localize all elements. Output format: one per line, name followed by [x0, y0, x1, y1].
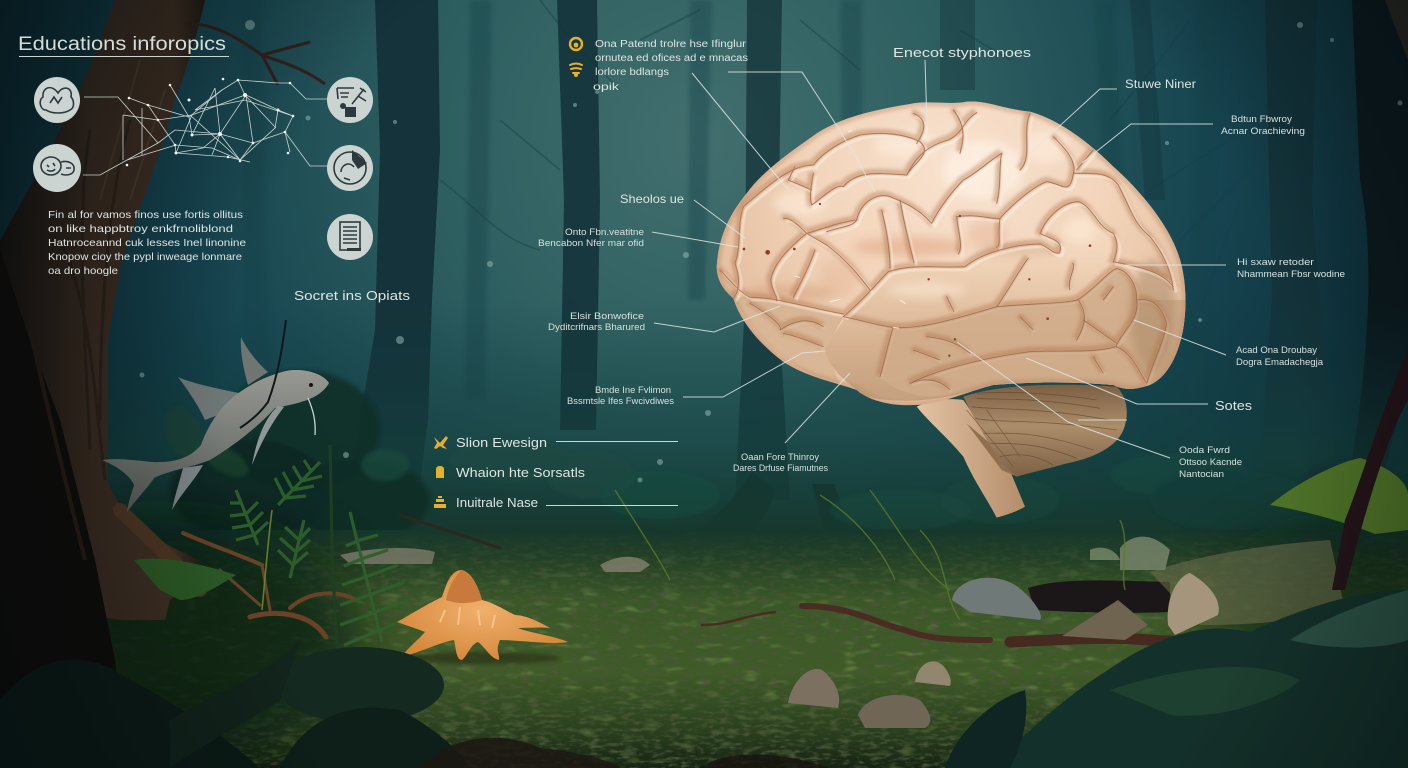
intro text block: [48, 209, 246, 277]
top note text: opik: [593, 82, 620, 93]
forest floor: [0, 490, 1408, 768]
fallen branches: [400, 515, 1295, 642]
inner rim shading: [717, 101, 1185, 405]
brain labels: Dares Drfuse Fiamutnes: [733, 463, 828, 474]
icon: yellow stack: [434, 496, 446, 508]
brain labels: Acad Ona Droubay: [1236, 345, 1317, 356]
icon: brain hands: [34, 77, 80, 123]
dark log: [1028, 580, 1170, 613]
list: key items: Slion Ewesign: [456, 435, 547, 450]
undergrowth leaves: [156, 370, 1400, 540]
sulci: [720, 110, 1173, 317]
temporal lobes: [825, 257, 1186, 401]
brain labels: Bdtun Fbwroy: [1231, 114, 1292, 125]
soft shading: [743, 130, 1177, 373]
list: key items: Inuitrale Nase: [456, 495, 538, 510]
icon: yellow figure: [434, 436, 448, 449]
brain labels: Bmde Ine Fvlimon: [595, 385, 671, 396]
network diagram: [83, 78, 330, 175]
bottom trunks: [700, 472, 853, 545]
pale log: [1150, 540, 1345, 625]
roots: [120, 510, 355, 637]
brain labels: Bencabon Nfer mar ofid: [538, 238, 644, 249]
brain labels: Ottsoo Kacnde: [1179, 457, 1242, 468]
icon: grey fish: [102, 320, 329, 512]
leader lines: [652, 60, 1226, 458]
intro text block: oa dro hoogle: [48, 265, 118, 277]
brain labels: Dyditcrifnars Bharured: [548, 322, 645, 333]
brain labels: Bssmtsle Ifes Fwcivdiwes: [567, 396, 674, 407]
bottom-left leaves: [0, 660, 260, 768]
red specks: [743, 203, 1091, 357]
foreground foliage: [0, 350, 1408, 768]
top note text: lorlore bdlangs: [595, 67, 669, 78]
top note text: ornutea ed ofices ad e mnacas: [595, 53, 748, 64]
icon: dial chart: [327, 145, 373, 191]
icon: yellow door: [436, 466, 444, 478]
intro text block: Knopow cioy the pypl inweage lonmare: [48, 251, 242, 263]
foreground trunk: [0, 250, 125, 768]
sulci highlight: [723, 113, 1176, 319]
intro text block: Hatnroceannd cuk lesses Inel linonine: [48, 237, 246, 249]
bottom dark mass: [420, 738, 620, 768]
ferns: [230, 445, 408, 650]
icon: speech bubbles: [33, 144, 81, 192]
intro text block: Fin al for vamos finos use fortis ollitus: [48, 209, 243, 221]
right foreground leaves: [990, 590, 1408, 768]
right dark branch: [1332, 350, 1408, 590]
orbital lower frontal: [733, 297, 843, 383]
rocks: [340, 537, 1219, 728]
brain cerebrum: [717, 101, 1190, 405]
brain labels: Acnar Orachieving: [1221, 126, 1305, 137]
bokeh dust: [140, 20, 1402, 482]
brain labels: Nhammean Fbsr wodine: [1237, 269, 1345, 280]
brain labels: Sotes: [1215, 399, 1252, 413]
subheading: left: Socret ins Opiats: [294, 288, 411, 303]
left floor shade: [0, 520, 360, 760]
brain labels: Oaan Fore Thinroy: [741, 452, 819, 463]
top note text: [593, 39, 748, 93]
brain labels: Sheolos ue: [620, 192, 684, 206]
sulci shadow: [719, 108, 1172, 388]
brain labels: Onto Fbn.veatitne: [565, 227, 644, 238]
icon: document: [327, 214, 373, 260]
icon: yellow wifi: [570, 64, 582, 76]
brain labels: Ooda Fwrd: [1179, 445, 1230, 456]
mid tree trunks: [350, 0, 1340, 500]
brain labels: Enecot styphonoes: [893, 45, 1032, 60]
right floor shade: [1210, 530, 1408, 710]
brain labels: Nantocian: [1179, 469, 1224, 480]
left tree: [0, 0, 355, 768]
brain labels: Dogra Emadachegja: [1236, 357, 1324, 368]
icon: teaching: [327, 77, 373, 123]
brain labels: Elsir Bonwofice: [570, 311, 644, 322]
list: key items: Whaion hte Sorsatls: [456, 465, 586, 480]
list: key items: [434, 435, 678, 510]
brain labels: Hi sxaw retoder: [1237, 257, 1314, 268]
overhead branch: [185, 24, 325, 85]
title: Educations inforopics: [18, 34, 226, 55]
far bare branches: [440, 0, 1300, 340]
green leaf on root: [134, 559, 236, 600]
intro text block: on like happbtroy enkfrnoliblond: [48, 223, 233, 235]
brain labels: Stuwe Niner: [1125, 79, 1196, 91]
icon: orange starfish creature: [397, 570, 568, 664]
cerebellum and brainstem: [917, 385, 1127, 518]
brain labels: [538, 45, 1345, 480]
icon: yellow ring: [570, 38, 582, 50]
grass blades: [615, 490, 1125, 620]
top note text: Ona Patend trolre hse Ifinglur: [595, 39, 747, 50]
right bright leaf: [1270, 458, 1408, 534]
right edge tree: [1345, 0, 1408, 500]
